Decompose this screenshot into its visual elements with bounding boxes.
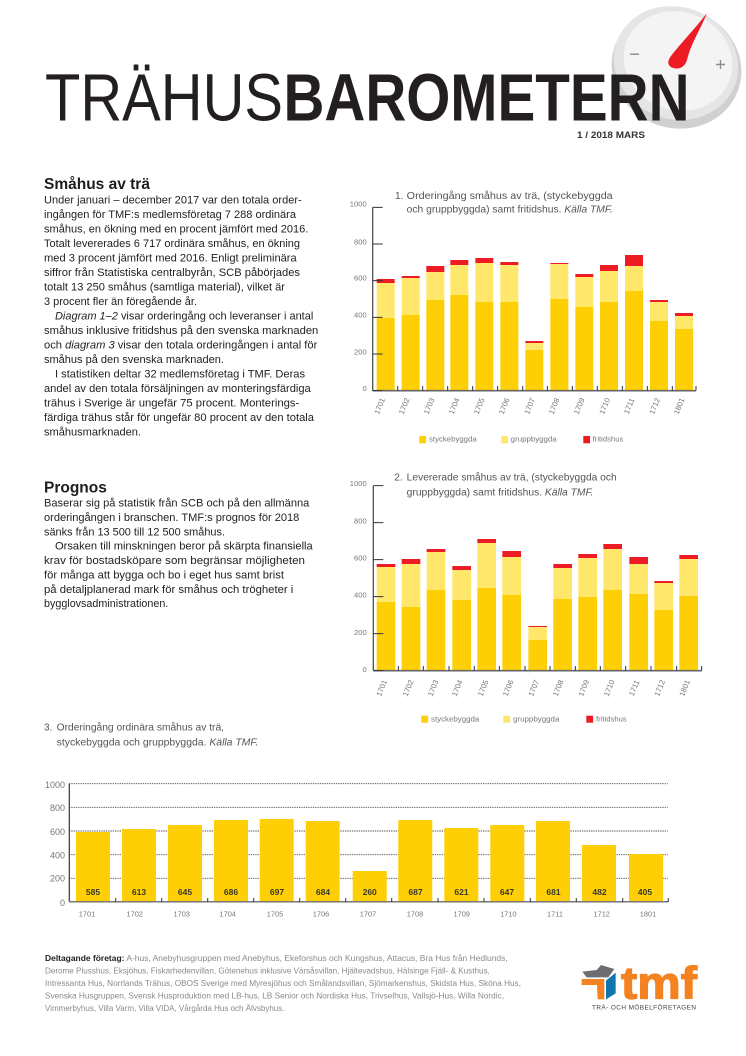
text block: småhus body: småhusmarknaden. — [44, 426, 141, 438]
chart 3 y axis labels: 400 — [50, 850, 65, 860]
text block: småhus body: färdiga trähus står för ungefär 80 procent av den totala — [44, 412, 315, 424]
chart 1 title: och gruppbyggda) samt fritidshus. Källa TMF. — [407, 205, 613, 216]
chart 3 y axis labels: 0 — [60, 898, 65, 908]
chart 2 x axis labels: 1702 — [401, 679, 416, 698]
chart 3 x axis labels: 1710 — [500, 910, 517, 919]
chart 1 title: Orderingång småhus av trä, (styckebyggda — [407, 190, 613, 202]
chart 2 x axis labels: 1708 — [551, 679, 566, 698]
chart 1 x axis labels: 1710 — [597, 397, 612, 416]
text block: småhus body: siffror från Statistiska centralbyrån, SCB påbörjades — [44, 267, 300, 279]
chart 2 title: Levererade småhus av trä, (styckebyggda och — [407, 472, 617, 484]
chart 3 x axis labels: 1708 — [407, 910, 423, 919]
chart 1 x axis labels: 1702 — [397, 397, 412, 416]
chart 1 x axis labels: 1712 — [647, 397, 662, 416]
chart 3 x axis labels: 1703 — [173, 910, 190, 919]
chart 2 y axis labels: 600 — [354, 553, 367, 562]
title — [45, 60, 690, 136]
chart 2 y axis labels: 800 — [354, 516, 367, 525]
chart 1 x axis labels: 1709 — [572, 397, 587, 416]
chart 3 x axis labels: 1706 — [313, 910, 329, 919]
title: TRÄHUS — [45, 60, 283, 136]
chart 3 bar values: 613 — [132, 887, 146, 897]
chart 3 x axis labels: 1801 — [640, 910, 656, 919]
chart 3 x axis labels: 1702 — [126, 910, 143, 919]
heading: småhus av trä: Småhus av trä — [44, 176, 150, 193]
text block: prognos body: orderingången i branschen. TMF:s prognos för 2018 — [44, 512, 299, 524]
chart 2: levererade småhus — [350, 472, 702, 724]
chart 3 bar values: 687 — [408, 887, 423, 897]
chart 1 x axis labels: 1711 — [622, 397, 636, 415]
chart 3 bar values: 260 — [363, 887, 377, 897]
text block: småhus body: småhus, en ökning med en procent jämfört med 2016. — [44, 223, 308, 235]
logo: tmf — [582, 958, 698, 1012]
chart 1 x axis labels: 1707 — [522, 397, 537, 416]
chart 3 bar values: 686 — [224, 887, 238, 897]
chart 3 bar values: 482 — [592, 887, 607, 897]
chart 3 bar values: 645 — [178, 887, 192, 897]
chart 1 x axis labels — [372, 397, 687, 416]
chart 1 x axis labels: 1708 — [547, 397, 562, 416]
text block: prognos body: bygglovsadministrationen. — [44, 598, 168, 610]
chart 3 x axis labels — [79, 910, 656, 919]
chart 3 x axis labels: 1704 — [219, 910, 236, 919]
chart 3 bar values: 621 — [454, 887, 469, 897]
chart 3 title: styckebyggda och gruppbyggda. Källa TMF. — [57, 738, 258, 749]
chart 2 x axis labels: 1703 — [426, 679, 441, 698]
panel: småhus av trä text — [44, 176, 318, 438]
chart 1 legend: fritidshus — [593, 435, 624, 444]
text block: prognos body: Baserar sig på statistik från SCB och på den allmänna — [44, 498, 310, 510]
chart 1 y axis labels: 400 — [354, 311, 367, 320]
chart 3: orderingång ordinära småhus — [44, 722, 668, 919]
chart 3 x axis labels: 1705 — [267, 910, 283, 919]
chart 2 legend: styckebyggda — [431, 715, 480, 724]
text block: deltagande företag: Derome Plusshus, Eksjöhus, Fiskarhedenvillan, Götenehus inklusive Värsåsvillan, Hjältevadshus, Hälsinge Fjäll- & Kusthus, — [45, 966, 490, 976]
chart 2 stacked bars — [373, 486, 702, 671]
chart 2 y axis labels: 400 — [354, 591, 367, 600]
chart 2 x axis labels: 1712 — [652, 679, 667, 698]
chart 2 x axis labels: 1706 — [501, 679, 516, 698]
chart 1 y axis labels: 0 — [362, 384, 367, 393]
chart 1 legend — [419, 435, 624, 444]
panel: prognos text — [44, 480, 313, 610]
chart 3 x axis labels: 1709 — [453, 910, 470, 919]
chart 3 title: 3. — [44, 723, 52, 734]
text block: småhus body: I statistiken deltar 32 medlemsföretag i TMF. Deras — [55, 368, 305, 380]
text block: småhus body: totalt 13 250 småhus (samtliga material), vilket är — [44, 281, 285, 293]
chart 1 title — [395, 190, 613, 216]
chart 1 y axis labels: 1000 — [350, 200, 367, 209]
icon: tmf house mark — [582, 965, 616, 999]
chart 2 title: 2. — [394, 473, 403, 484]
chart 1 y axis labels — [350, 200, 367, 393]
chart 1: orderingång småhus — [350, 190, 696, 444]
chart 2 x axis labels: 1704 — [450, 679, 465, 698]
chart 3 bar values: 681 — [546, 887, 561, 897]
chart 3 bar values: 647 — [500, 887, 514, 897]
chart 1 x axis labels: 1706 — [497, 397, 512, 416]
chart 3 y axis labels: 200 — [50, 874, 65, 884]
text block: deltagande företag: Intressanta Hus, Norrlands Trähus, OBOS Sverige med Myresjöhus och Smålandsvillan, Sjömarkenshus, Skidsta Hus, Sköna Hus, — [45, 978, 521, 988]
chart 3 x axis labels: 1701 — [79, 910, 95, 919]
chart 3 title — [44, 722, 258, 749]
chart 2 y axis labels: 1000 — [350, 479, 367, 488]
text block: småhus body: småhus inklusive fritidshus på den svenska marknaden — [44, 325, 318, 337]
chart 1 y axis labels: 800 — [354, 237, 367, 246]
chart 2 x axis labels: 1701 — [374, 679, 389, 698]
text block: deltagande företag: Svenska Husgruppen, Svensk Husproduktion med LB-hus, LB Senior och Nordiska Hus, Trivselhus, Vallsjö-Hus, Willa Nordic, — [45, 990, 504, 1000]
chart 2 title: gruppbyggda) samt fritidshus. Källa TMF. — [407, 488, 593, 499]
chart 3 bars — [76, 819, 663, 902]
chart 1 y axis labels: 200 — [354, 347, 367, 356]
text block: småhus body: andel av den totala försäljningen av monteringsfärdiga — [44, 383, 311, 395]
chart 2 x axis labels: 1711 — [627, 679, 641, 697]
text block: prognos body: på detaljplanerad mark för småhus och trögheter i — [44, 584, 293, 596]
chart 1 x axis labels: 1704 — [447, 397, 462, 416]
chart 3 x axis labels: 1712 — [593, 910, 610, 919]
chart 2 x axis labels: 1710 — [602, 679, 617, 698]
chart 1 y axis labels: 600 — [354, 274, 367, 283]
text block: småhus body: trähus i Sverige är ungefär 75 procent. Monterings- — [44, 397, 300, 409]
chart 2 x axis labels: 1801 — [677, 679, 692, 698]
chart 2 x axis labels — [374, 679, 692, 698]
chart 1 legend: styckebyggda — [429, 435, 477, 444]
logo: tmf: TRÄ- OCH MÖBELFÖRETAGEN — [592, 1004, 696, 1012]
chart 3 bar values: 585 — [86, 887, 100, 897]
chart 3 y axis labels: 1000 — [45, 780, 65, 790]
chart 1 x axis labels: 1705 — [472, 397, 487, 416]
chart 3 bar values: 405 — [638, 887, 652, 897]
text block: prognos body: sänks från 13 500 till 12 500 småhus. — [44, 526, 225, 538]
chart 1 x axis labels: 1801 — [672, 397, 687, 416]
text block: småhus body: Diagram 1–2 visar orderingång och leveranser i antal — [55, 310, 313, 322]
chart 2 legend — [421, 715, 627, 724]
chart 3 x axis labels: 1711 — [547, 910, 563, 919]
text block: prognos body: krav för bostadsköpare som begränsar möjligheten — [44, 555, 305, 567]
text block: prognos body: för många att bygga och bo i eget hus samt brist — [44, 569, 285, 581]
chart 1 legend: gruppbyggda — [511, 435, 557, 444]
text block: småhus body — [44, 194, 318, 438]
text block: småhus body: 3 procent fler än föregående år. — [44, 296, 197, 308]
heading: prognos: Prognos — [44, 480, 107, 497]
text block: småhus body: Totalt levererades 6 717 ordinära småhus, en ökning — [44, 238, 300, 250]
chart 1 title: 1. — [395, 191, 403, 202]
text block: prognos body — [44, 498, 313, 610]
issue date: 1 / 2018 MARS — [577, 130, 646, 141]
chart 2 x axis labels: 1707 — [526, 679, 541, 698]
text block: småhus body: och diagram 3 visar den totala orderingången i antal för — [44, 339, 318, 351]
chart 2 legend: gruppbyggda — [513, 715, 560, 724]
text block: deltagande företag: Vimmerbyhus, Villa Varm, Villa VIDA, Vårgårda Hus och Älvsbyhus. — [45, 1003, 284, 1013]
chart 2 title — [394, 472, 617, 499]
chart 3 title: Orderingång ordinära småhus av trä, — [57, 722, 224, 734]
chart 2 y axis labels — [350, 479, 367, 674]
chart 1 x axis labels: 1703 — [422, 397, 437, 416]
chart 2 x axis labels: 1709 — [576, 679, 591, 698]
chart 3 bar values: 697 — [270, 887, 284, 897]
chart 1 x axis labels: 1701 — [372, 397, 387, 416]
chart 2 x axis labels: 1705 — [476, 679, 491, 698]
chart 2 legend: fritidshus — [596, 715, 627, 724]
logo: tmf: tmf — [621, 958, 698, 1008]
text block: prognos body: Orsaken till minskningen beror på skärpta finansiella — [55, 541, 313, 553]
icon: barometer dial — [594, 0, 746, 147]
text block: småhus body: med 3 procent jämfört med 2016. Enligt preliminära — [44, 252, 297, 264]
chart 3 y axis labels: 800 — [50, 803, 65, 813]
chart 1 stacked bars — [373, 207, 696, 391]
chart 2 y axis labels: 200 — [354, 628, 367, 637]
chart 2 y axis labels: 0 — [362, 665, 367, 674]
chart 3 bar values — [86, 887, 652, 897]
chart 3 y axis labels — [45, 780, 65, 908]
text block: småhus body: Under januari – december 2017 var den totala order- — [44, 194, 302, 206]
text block: småhus body: småhus på den svenska marknaden. — [44, 354, 224, 366]
chart 3 x axis labels: 1707 — [360, 910, 376, 919]
text block: deltagande företag — [45, 953, 521, 1013]
text block: deltagande företag: Deltagande företag: A-hus, Anebyhusgruppen med Anebyhus, Ekeforshus och Kungshus, Attacus, Bra Hus från Hedlunds, — [45, 953, 508, 963]
text block: småhus body: ingången för TMF:s medlemsföretag 7 288 ordinära — [44, 209, 297, 221]
chart 3 bar values: 684 — [316, 887, 330, 897]
chart 3 y axis labels: 600 — [50, 827, 65, 837]
